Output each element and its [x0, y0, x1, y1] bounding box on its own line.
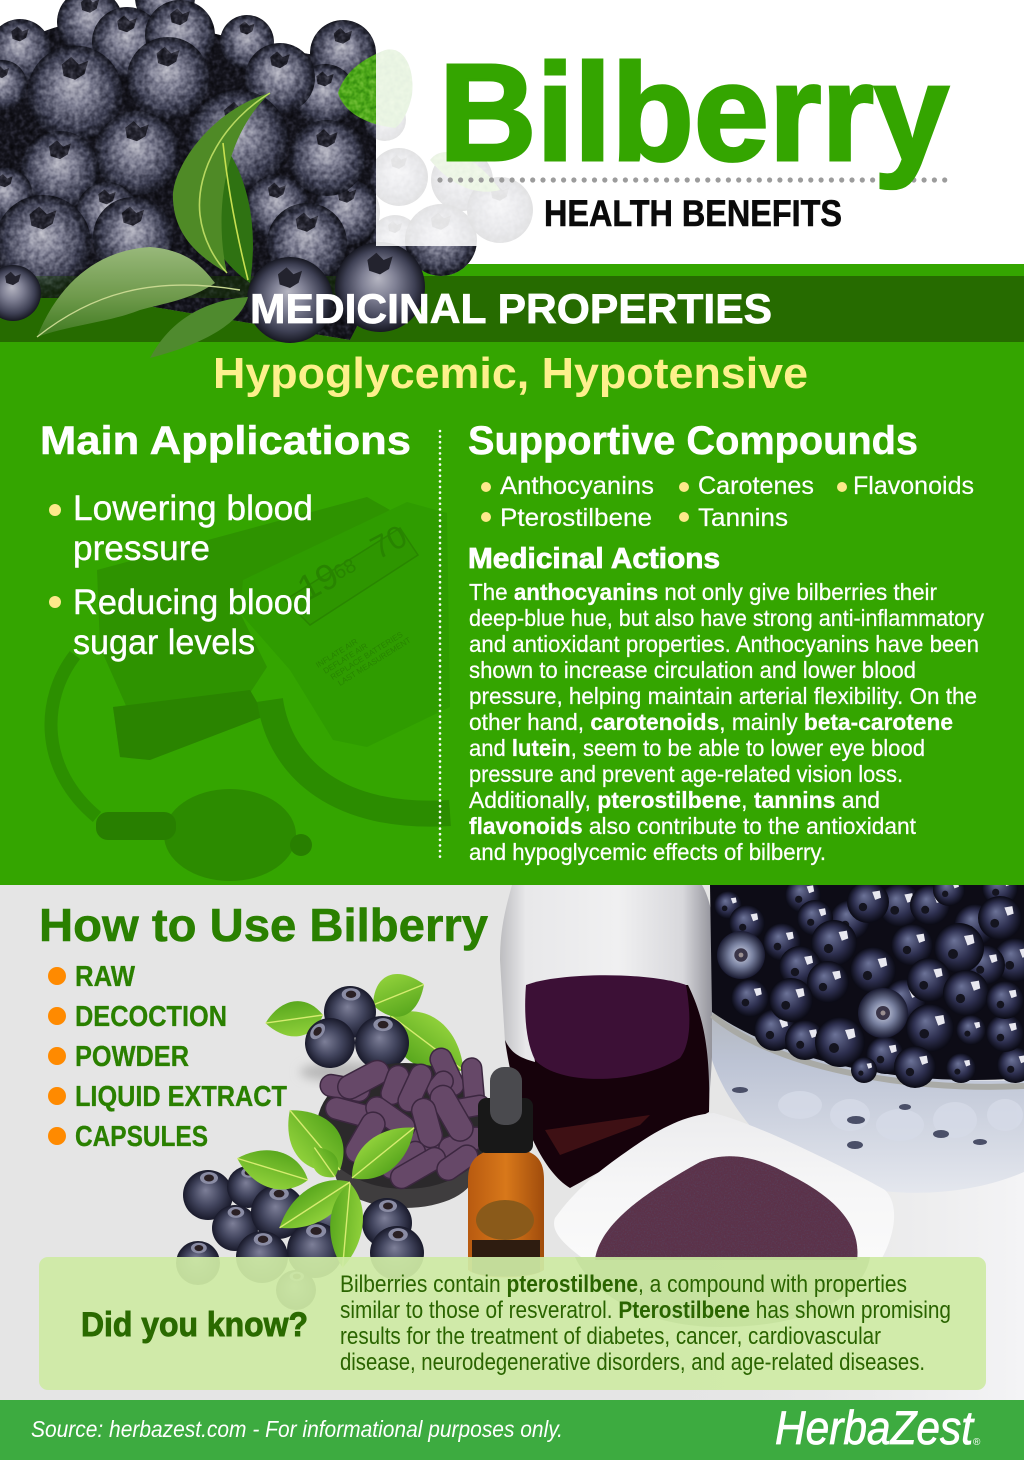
heading: supportive compounds: Supportive Compounds: [468, 419, 918, 463]
medicinal actions paragraph: pressure and prevent age-related vision loss.: [469, 761, 903, 787]
medicinal actions paragraph: and antioxidant properties. Anthocyanins have been: [469, 631, 979, 657]
list: forms of use: RAW: [75, 961, 136, 993]
bullet: reducing blood sugar levels: Reducing blood: [73, 583, 312, 622]
hero foreground: leaves and front berries: [0, 93, 425, 358]
medicinal actions paragraph: The anthocyanins not only give bilberries their: [469, 579, 937, 605]
callout text: results for the treatment of diabetes, cancer, cardiovascular: [340, 1323, 881, 1350]
photo: glass bowl of bilberries: [710, 870, 1024, 1193]
bullet: reducing blood sugar levels: [49, 583, 312, 662]
bullet: lowering blood pressure: [49, 489, 313, 568]
compound list: Carotenes: [698, 472, 814, 500]
background illustration: blood pressure monitor: DEFLATE AIR: [322, 641, 369, 676]
logo: HerbaZest: ®: [973, 1437, 981, 1448]
medicinal actions paragraph: flavonoids also contribute to the antioxidant: [469, 813, 917, 839]
background illustration: blood pressure monitor: [51, 497, 450, 881]
dish reflection in callout: [575, 1257, 870, 1327]
compound list: Tannins: [698, 504, 788, 532]
photo: bowl of capsules: [317, 1045, 493, 1208]
callout text: disease, neurodegenerative disorders, and age-related diseases.: [340, 1349, 925, 1376]
source note: Source: herbazest.com - For informational purposes only.: [31, 1416, 563, 1442]
photo: white dish of powder: [554, 1113, 894, 1260]
title: Bilberry: [439, 36, 949, 190]
footer bar: [0, 1400, 1024, 1460]
callout text: Bilberries contain pterostilbene, a compound with properties: [340, 1271, 907, 1298]
heading: medicinal actions: Medicinal Actions: [468, 543, 720, 575]
compound list: Pterostilbene: [500, 504, 652, 532]
heading: medicinal properties: MEDICINAL PROPERTIES: [250, 285, 772, 332]
list: forms of use: CAPSULES: [75, 1121, 208, 1153]
list: forms of use: POWDER: [75, 1041, 189, 1073]
callout text: [340, 1271, 951, 1376]
subheading: properties: Hypoglycemic, Hypotensive: [213, 349, 808, 398]
medicinal actions paragraph: and hypoglycemic effects of bilberry.: [469, 839, 826, 865]
vertical dotted divider: [439, 431, 441, 860]
compound list: [481, 472, 974, 532]
medicinal actions paragraph: deep-blue hue, but also have strong anti-inflammatory: [469, 605, 984, 631]
callout text: similar to those of resveratrol. Pterostilbene has shown promising: [340, 1297, 951, 1324]
callout: did you know: [39, 1257, 986, 1390]
background illustration: blood pressure monitor: 68: [330, 555, 360, 584]
compound list: Flavonoids: [853, 472, 974, 500]
background illustration: blood pressure monitor: 70: [364, 518, 413, 566]
medicinal actions paragraph: shown to increase circulation and lower blood: [469, 657, 916, 683]
dotted rule under title: [440, 177, 950, 183]
list: forms of use: LIQUID EXTRACT: [75, 1081, 287, 1113]
bullet: lowering blood pressure: Lowering blood: [73, 489, 313, 528]
compound list: Anthocyanins: [500, 472, 654, 500]
callout heading: Did you know?: [81, 1306, 308, 1344]
medicinal actions paragraph: pressure, helping maintain arterial flexibility. On the: [469, 683, 977, 709]
photo: berries and leaves, lower cluster: [176, 1095, 426, 1310]
heading: main applications: Main Applications: [40, 419, 411, 463]
list: forms of use: DECOCTION: [75, 1001, 227, 1033]
photo: amber dropper bottle: [468, 1067, 544, 1278]
medicinal actions paragraph: and lutein, seem to be able to lower eye blood: [469, 735, 925, 761]
bullet: lowering blood pressure: pressure: [73, 529, 210, 568]
hero photo: bilberries and leaves: [0, 0, 533, 340]
list: forms of use: [48, 961, 287, 1153]
logo: HerbaZest: HerbaZest: [775, 1401, 975, 1454]
dark band overlay on hero: [0, 276, 340, 298]
panel: supportive compounds: [468, 419, 984, 865]
background illustration: blood pressure monitor: INFLATE AIR: [314, 637, 359, 670]
medicinal actions paragraph: Additionally, pterostilbene, tannins and: [469, 787, 880, 813]
bullet: reducing blood sugar levels: sugar levels: [73, 623, 255, 662]
panel: medicinal properties background: [0, 264, 1024, 885]
panel: how to use background: [0, 885, 1024, 1400]
panel: main applications: [40, 419, 411, 662]
heading: how to use bilberry: How to Use Bilberry: [39, 899, 488, 951]
subtitle: HEALTH BENEFITS: [544, 193, 842, 234]
medicinal actions paragraph: other hand, carotenoids, mainly beta-carotene: [469, 709, 953, 735]
translucent white title panel: [376, 0, 1024, 246]
background illustration: blood pressure monitor: REPLACE BATTERIES: [329, 630, 404, 682]
photo: glass jar of decoction: [500, 885, 715, 1188]
photo: leaves and berries, upper cluster: [263, 965, 478, 1090]
background illustration: blood pressure monitor: 19: [291, 554, 345, 609]
medicinal actions paragraph: [469, 579, 984, 865]
background illustration: blood pressure monitor: LAST MEASUREMENT: [336, 635, 413, 688]
